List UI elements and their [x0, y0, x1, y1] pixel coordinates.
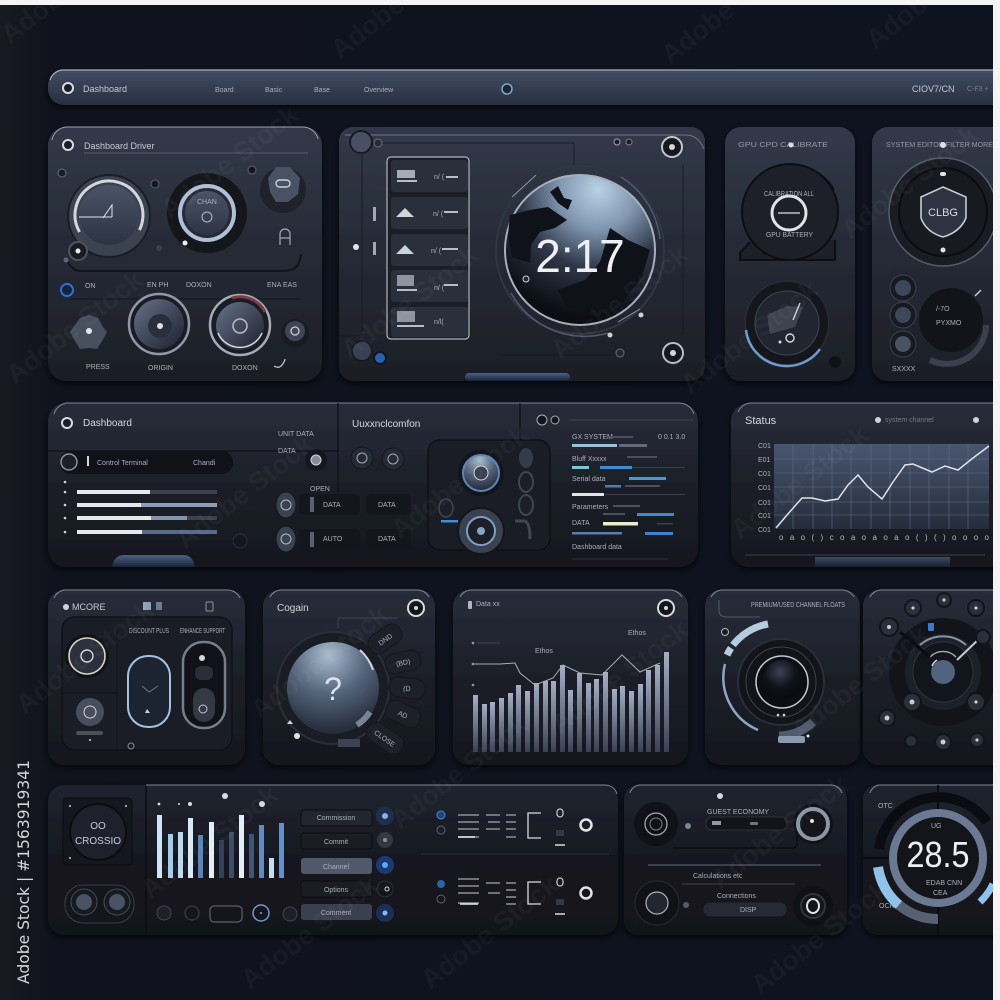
gauge: UG [931, 823, 942, 830]
speech bubble dial: CALIBRATION ALL [764, 191, 814, 198]
reading: 28.5 [906, 834, 970, 875]
list row 1 [391, 160, 468, 192]
watermark pattern: Adobe Stock [705, 769, 855, 895]
panel: temperature gauge: OCR [879, 903, 895, 910]
satellite knobs [879, 593, 990, 750]
status meters: 0 0.1 3.0 [658, 434, 685, 441]
panel heading: Dashboard Driver [84, 141, 155, 151]
panel: temperature gauge: OTC [878, 803, 893, 810]
status label row: ENA EAS [267, 282, 297, 289]
list row 5: n/l( [434, 319, 444, 326]
panel: radial selector [863, 590, 1000, 765]
continents [508, 186, 650, 317]
control row bottom: DISP [740, 907, 757, 914]
panel: bar chart: Ethos [535, 648, 553, 655]
panel: bar chart: Data xx [476, 601, 500, 608]
top navigation bar: Dashboard [83, 84, 127, 94]
option pills: AD [396, 710, 408, 721]
watermark pattern: Adobe Stock [675, 274, 825, 400]
panel: bar chart [453, 590, 688, 765]
top navigation bar: Basic [265, 87, 283, 94]
option pills: (D [403, 686, 411, 693]
menu buttons: Commit [324, 839, 348, 846]
status meters: Dashboard data [572, 544, 622, 551]
watermark pattern: Adobe Stock [725, 419, 875, 545]
central hub [889, 618, 997, 726]
gear knob [70, 315, 107, 349]
menu buttons: Options [324, 887, 349, 894]
panel: bar chart: Ethos [628, 630, 646, 637]
panel: line chart: Status [745, 415, 777, 427]
list row 2: n/ ( [433, 211, 444, 218]
list row 4 [391, 270, 468, 302]
weather list [387, 157, 469, 339]
status label row: EN PH [147, 282, 168, 289]
list row 2 [391, 197, 468, 229]
panel: speaker dial [705, 590, 860, 765]
toggle labels: ENHANCE SUPPORT [180, 628, 225, 635]
panel: shield: SXXXX [892, 366, 916, 373]
toggle row 1: OPEN [310, 486, 330, 493]
trend line [473, 655, 660, 685]
control row bottom: Calculations etc [693, 873, 743, 880]
bars [473, 652, 669, 752]
watermark pattern: Adobe Stock [545, 614, 695, 740]
knob right [210, 295, 270, 355]
stock id side label: Adobe Stock | #1563919341 [14, 760, 33, 984]
watermark pattern: Adobe Stock [335, 239, 485, 365]
panel: speech gauge: GPU CPD CALIBRATE [738, 142, 828, 149]
y axis labels: E01 [758, 457, 771, 464]
watermark pattern: Adobe Stock [155, 99, 305, 225]
panel: speaker dial: PREMIUM/USED CHANNEL FLOATS [751, 602, 845, 609]
panel: toggles [48, 590, 245, 765]
panel: shield [872, 127, 1000, 381]
gauge: CEA [933, 890, 948, 897]
status label row: ON [85, 283, 96, 290]
menu buttons: Comment [321, 910, 351, 917]
y axis labels [758, 443, 771, 534]
control row top [673, 809, 797, 848]
corner knobs [350, 131, 683, 364]
list row 3: n/ ( [431, 248, 442, 255]
side labels [373, 207, 376, 255]
toggle row 1: DATA [378, 502, 396, 509]
y axis labels: C01 [758, 471, 771, 478]
y axis labels: C01 [758, 527, 771, 534]
panel: control console [48, 403, 698, 567]
panel: line chart [731, 403, 1000, 567]
top navigation bar [48, 70, 1000, 105]
watermark pattern: Adobe Stock [545, 239, 695, 365]
watermark pattern: Adobe Stock [385, 419, 535, 545]
panel: temperature gauge [863, 785, 1000, 935]
blue ring dial: CHAN [197, 199, 217, 206]
menu indicator lights [376, 807, 394, 922]
time: 2:17 [535, 230, 625, 282]
watermark pattern: Adobe Stock [245, 599, 395, 725]
watermark pattern: Adobe Stock [385, 709, 535, 835]
watermark pattern: Adobe Stock [415, 869, 565, 995]
top navigation bar: Base [314, 87, 330, 94]
status pill: Chandi [193, 460, 216, 467]
base glow [745, 555, 985, 567]
bottom labels: ORIGIN [148, 365, 173, 372]
watermark pattern: Adobe Stock [135, 779, 285, 905]
console heading: DATA [278, 448, 296, 455]
needles [900, 623, 981, 660]
list row 3 [391, 234, 468, 266]
status label row [61, 282, 300, 299]
watermark pattern: Adobe Stock [785, 619, 935, 745]
control row bottom: Connections [717, 893, 756, 900]
control row top: GUEST ECONOMY [707, 809, 769, 816]
round knob top [65, 634, 109, 678]
knob bottom right [793, 886, 833, 926]
toggle row 1 [276, 486, 411, 518]
control sub-panel [428, 440, 550, 554]
option pills [363, 620, 426, 758]
panel: help dial [263, 590, 435, 765]
console heading: UNIT DATA [278, 431, 314, 438]
panel: world clock [339, 127, 705, 381]
sphere dial: ? [324, 671, 342, 707]
hex bolt icon [260, 167, 306, 213]
chart plot [774, 444, 989, 529]
knob left [129, 294, 189, 354]
list row 5 [391, 307, 468, 337]
corner button [658, 600, 674, 616]
lock glyph [280, 229, 290, 245]
shield dial: CLBG [928, 207, 958, 219]
panel: compact controls [624, 785, 847, 935]
menu buttons: Channel [323, 864, 349, 871]
round knob bottom [76, 698, 104, 741]
option pills: (BD) [396, 659, 411, 668]
y axis labels: C01 [758, 500, 771, 507]
slider bars [62, 481, 247, 548]
panel: toggles: MCORE [72, 602, 106, 612]
speech bubble dial: GPU BATTERY [766, 232, 813, 239]
panel: equalizer console [48, 785, 618, 935]
blue ring dial [167, 173, 247, 253]
panel: speech gauge [725, 127, 855, 381]
console heading [62, 418, 420, 455]
status meters [537, 415, 693, 559]
top navigation bar: CIOV7/CN [912, 84, 955, 94]
sphere dial [277, 632, 389, 747]
gear hub [86, 328, 92, 334]
small knob [281, 319, 309, 347]
option pills: CLOSE [372, 730, 396, 749]
globe clock [496, 166, 664, 338]
panel: dashboard driver [48, 127, 322, 381]
toggle row 2: DATA [378, 536, 396, 543]
panel: line chart: system channel [885, 417, 934, 424]
inset tray [68, 254, 301, 271]
status meters: GX SYSTEM [572, 434, 613, 441]
watermark pattern: Adobe Stock [170, 429, 320, 555]
bottom status line [614, 139, 632, 357]
left tick labels [472, 642, 500, 686]
twin knobs [65, 885, 134, 923]
panel: help dial: Cogain [277, 603, 309, 614]
menu buttons [301, 810, 372, 920]
equalizer bars [157, 815, 284, 878]
toggle row 1: DATA [323, 502, 341, 509]
y axis labels: C01 [758, 443, 771, 450]
badge dial: OO [90, 821, 106, 832]
dial rings [723, 624, 824, 743]
toggle labels: DISCOUNT PLUS [129, 628, 169, 635]
status pill: Control Terminal [97, 460, 148, 467]
list row 4: n/ ( [434, 285, 445, 292]
watermark pattern: Adobe Stock [745, 874, 895, 1000]
status meters: Parameters [572, 504, 609, 511]
pill switch one [128, 656, 170, 727]
shield dial [889, 158, 997, 266]
bottom labels: PRESS [86, 364, 110, 371]
badge dial [63, 798, 132, 865]
status meters: Serial data [572, 476, 606, 483]
top navigation bar: C-F3 + [967, 86, 989, 93]
small knobs stack [890, 275, 916, 357]
bottom gauge [745, 281, 841, 368]
small studs [58, 166, 256, 262]
status meters: DATA [572, 520, 590, 527]
watermark pattern: Adobe Stock [235, 869, 385, 995]
watermark pattern: Adobe Stock [835, 119, 985, 245]
gauge [878, 797, 993, 919]
x axis labels: o a o ( ) c o a o a o a o ( ) ( ) o o o o [779, 533, 990, 542]
status pill [60, 451, 233, 474]
mode dial [919, 288, 986, 364]
panel heading [63, 140, 308, 153]
bottom controls [157, 905, 297, 922]
knob bottom left [635, 881, 689, 925]
badge dial: CROSSIO [75, 836, 121, 847]
toggle labels [129, 628, 225, 635]
data row 1 [437, 809, 592, 846]
data row 2 [437, 878, 592, 915]
menu buttons: Commission [317, 815, 355, 822]
corner button [408, 600, 424, 616]
top navigation bar: Overview [364, 87, 394, 94]
panel: shield: SYSTEM EDITOR FILTER MORE [886, 142, 993, 149]
toggle row 2 [276, 526, 411, 552]
y axis labels: C01 [758, 513, 771, 520]
bottom tab glow [112, 555, 195, 567]
mode dial: PYXMO [936, 320, 962, 327]
toggle row 2: AUTO [323, 536, 343, 543]
bottom labels: DOXON [232, 365, 258, 372]
status meters: Bluff Xxxxx [572, 456, 607, 463]
dots above bars [158, 793, 265, 807]
knob top left [634, 802, 691, 846]
bottom glow [465, 373, 570, 381]
y axis labels: C01 [758, 485, 771, 492]
mode dial: /-7O [936, 306, 950, 313]
console heading: Dashboard [83, 418, 132, 429]
console heading: Uuxxnclcomfon [352, 419, 420, 430]
bottom labels [86, 359, 286, 370]
top navigation bar: Board [215, 87, 234, 94]
pill switch two [183, 642, 225, 728]
watermark pattern: Adobe Stock [0, 264, 150, 390]
knob top right [793, 804, 833, 844]
status label row: DOXON [186, 282, 212, 289]
small knobs row [305, 447, 404, 471]
option pills: DND [378, 633, 394, 647]
clock gauge [67, 174, 151, 261]
control row bottom [682, 873, 795, 917]
speech bubble dial [740, 164, 838, 260]
knob highlights [884, 598, 979, 744]
list row 1: n/ ( [434, 174, 445, 181]
watermark pattern: Adobe Stock [10, 594, 160, 720]
gauge: EDAB CNN [926, 880, 962, 887]
